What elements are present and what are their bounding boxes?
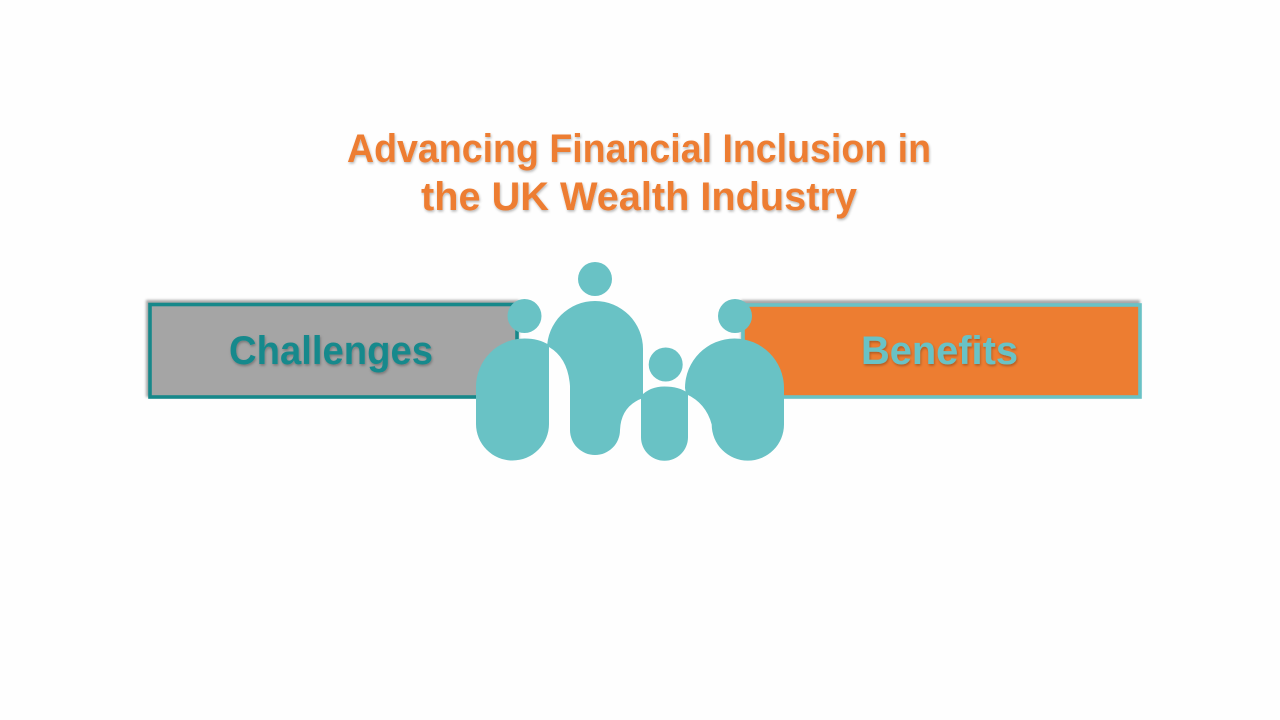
icon: family of four people (476, 262, 784, 461)
panel: challenges (146, 300, 519, 397)
title: the UK Wealth Industry (421, 175, 858, 219)
title (347, 127, 931, 219)
panel: benefits (741, 300, 1140, 397)
title: Advancing Financial Inclusion in (347, 127, 931, 171)
heading: challenges: Challenges (229, 329, 433, 373)
heading: benefits: Benefits (861, 329, 1018, 373)
